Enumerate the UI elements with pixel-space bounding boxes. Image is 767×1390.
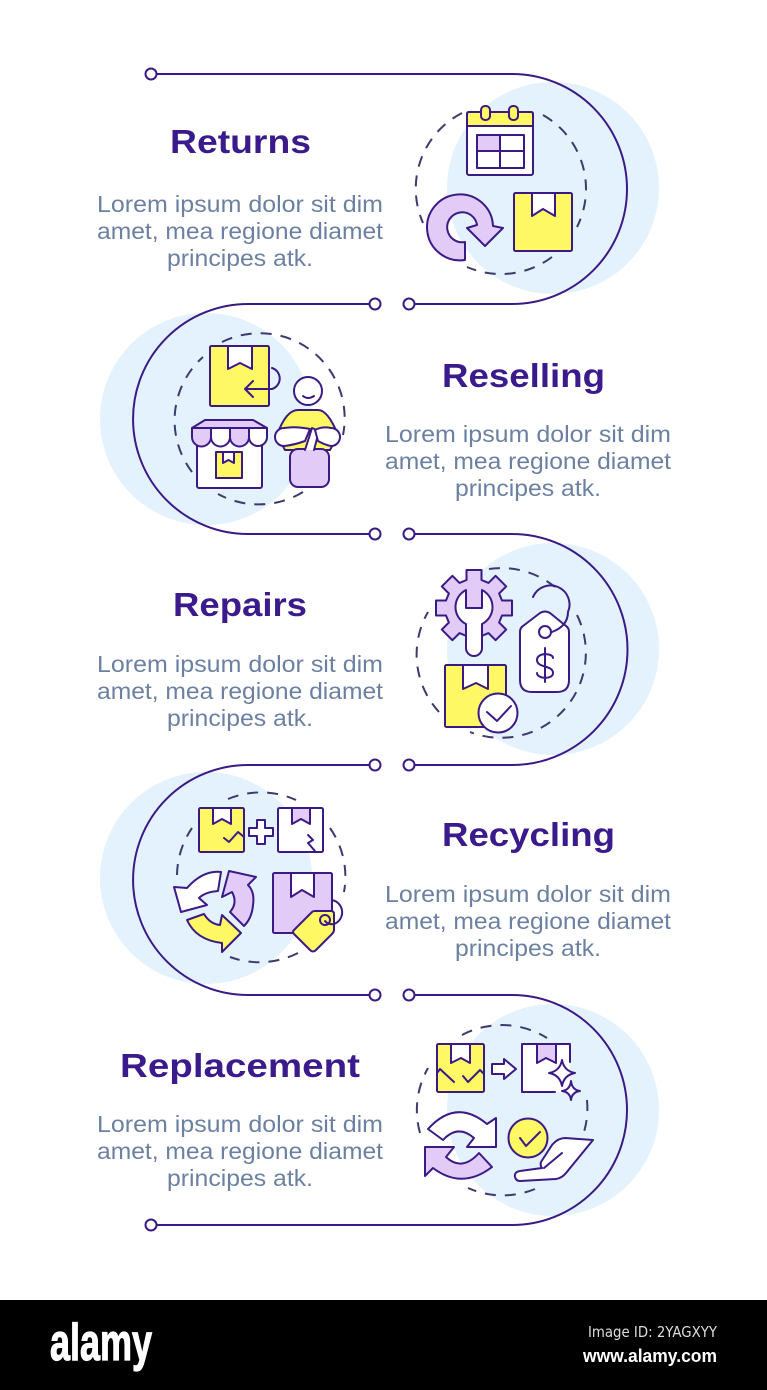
text block: repairs: principes atk. <box>167 705 313 731</box>
icon: approved package <box>445 665 518 732</box>
background circle: replacement <box>447 1004 659 1216</box>
text block: replacement <box>97 1111 384 1191</box>
icon: calendar <box>467 106 533 175</box>
background circle: reselling <box>100 313 312 525</box>
footer bar <box>0 1300 767 1390</box>
image id: Image ID: 2YAGXYY <box>588 1323 718 1341</box>
text block: replacement: principes atk. <box>167 1165 313 1191</box>
icon group: replacement <box>417 1025 593 1195</box>
icon: damaged yellow package <box>199 808 244 852</box>
text block: returns: principes atk. <box>167 245 313 271</box>
dashed ring <box>175 333 345 504</box>
icon: gear and wrench <box>436 570 512 656</box>
panel: recycling text <box>385 816 672 961</box>
heading: reselling: Reselling <box>442 357 605 394</box>
text block: recycling: principes atk. <box>455 935 601 961</box>
heading: replacement: Replacement <box>120 1047 360 1084</box>
icon: customer with bag <box>275 377 340 487</box>
panel: reselling text <box>385 357 672 501</box>
connector line: reselling <box>133 298 380 540</box>
connector line: replacement <box>146 990 627 1230</box>
text block: recycling <box>385 881 672 961</box>
text block: repairs: amet, mea regione diamet <box>97 678 384 704</box>
panel: returns text <box>97 123 384 271</box>
text block: replacement: Lorem ipsum dolor sit dim <box>97 1111 383 1137</box>
icon group: recycling <box>174 792 345 962</box>
icon group: reselling <box>175 333 345 504</box>
background circle: returns <box>447 82 659 294</box>
website: www.alamy.com <box>582 1346 717 1366</box>
icon: shop <box>192 420 267 488</box>
background circle: repairs <box>447 543 659 755</box>
heading: returns: Returns <box>170 123 311 160</box>
text block: reselling: principes atk. <box>455 475 601 501</box>
dashed ring <box>417 568 586 738</box>
icon: hand <box>515 1138 593 1181</box>
dashed ring <box>416 113 586 274</box>
icon: recycle arrows <box>174 871 256 952</box>
text block: recycling: Lorem ipsum dolor sit dim <box>385 881 671 907</box>
text block: reselling: amet, mea regione diamet <box>385 448 672 474</box>
icon: tagged package <box>273 873 342 952</box>
icon: price tag <box>520 585 570 692</box>
panel: replacement text <box>97 1047 384 1191</box>
icon group: returns <box>416 106 586 274</box>
heading: recycling: Recycling <box>442 816 615 853</box>
dashed ring <box>417 1025 587 1195</box>
text block: repairs <box>97 651 384 731</box>
connector line: recycling <box>133 760 380 1000</box>
dashed ring <box>177 792 345 962</box>
icon: damaged package <box>437 1044 484 1092</box>
background circle: recycling <box>100 772 312 984</box>
icon: new package <box>522 1044 580 1100</box>
text block: reselling: Lorem ipsum dolor sit dim <box>385 421 671 447</box>
icon: damaged white package <box>278 808 323 852</box>
text block: repairs: Lorem ipsum dolor sit dim <box>97 651 383 677</box>
icon: exchange arrows <box>425 1112 496 1179</box>
connector line: returns <box>146 68 627 310</box>
icon: package <box>514 193 572 251</box>
logo: alamy: alamy <box>50 1314 152 1372</box>
text block: returns: amet, mea regione diamet <box>97 218 384 244</box>
text block: reselling <box>385 421 672 501</box>
icon: check badge <box>508 1118 548 1158</box>
icon: returned package <box>210 346 280 406</box>
text block: returns: Lorem ipsum dolor sit dim <box>97 191 383 217</box>
icon: right arrow <box>492 1059 516 1079</box>
panel: repairs text <box>97 586 384 731</box>
heading: repairs: Repairs <box>173 586 307 623</box>
text block: replacement: amet, mea regione diamet <box>97 1138 384 1164</box>
icon: plus <box>249 820 273 844</box>
icon group: repairs <box>417 568 586 738</box>
icon: return arrow <box>427 194 503 260</box>
text block: recycling: amet, mea regione diamet <box>385 908 672 934</box>
connector line: repairs <box>404 528 628 770</box>
text block: returns <box>97 191 384 271</box>
